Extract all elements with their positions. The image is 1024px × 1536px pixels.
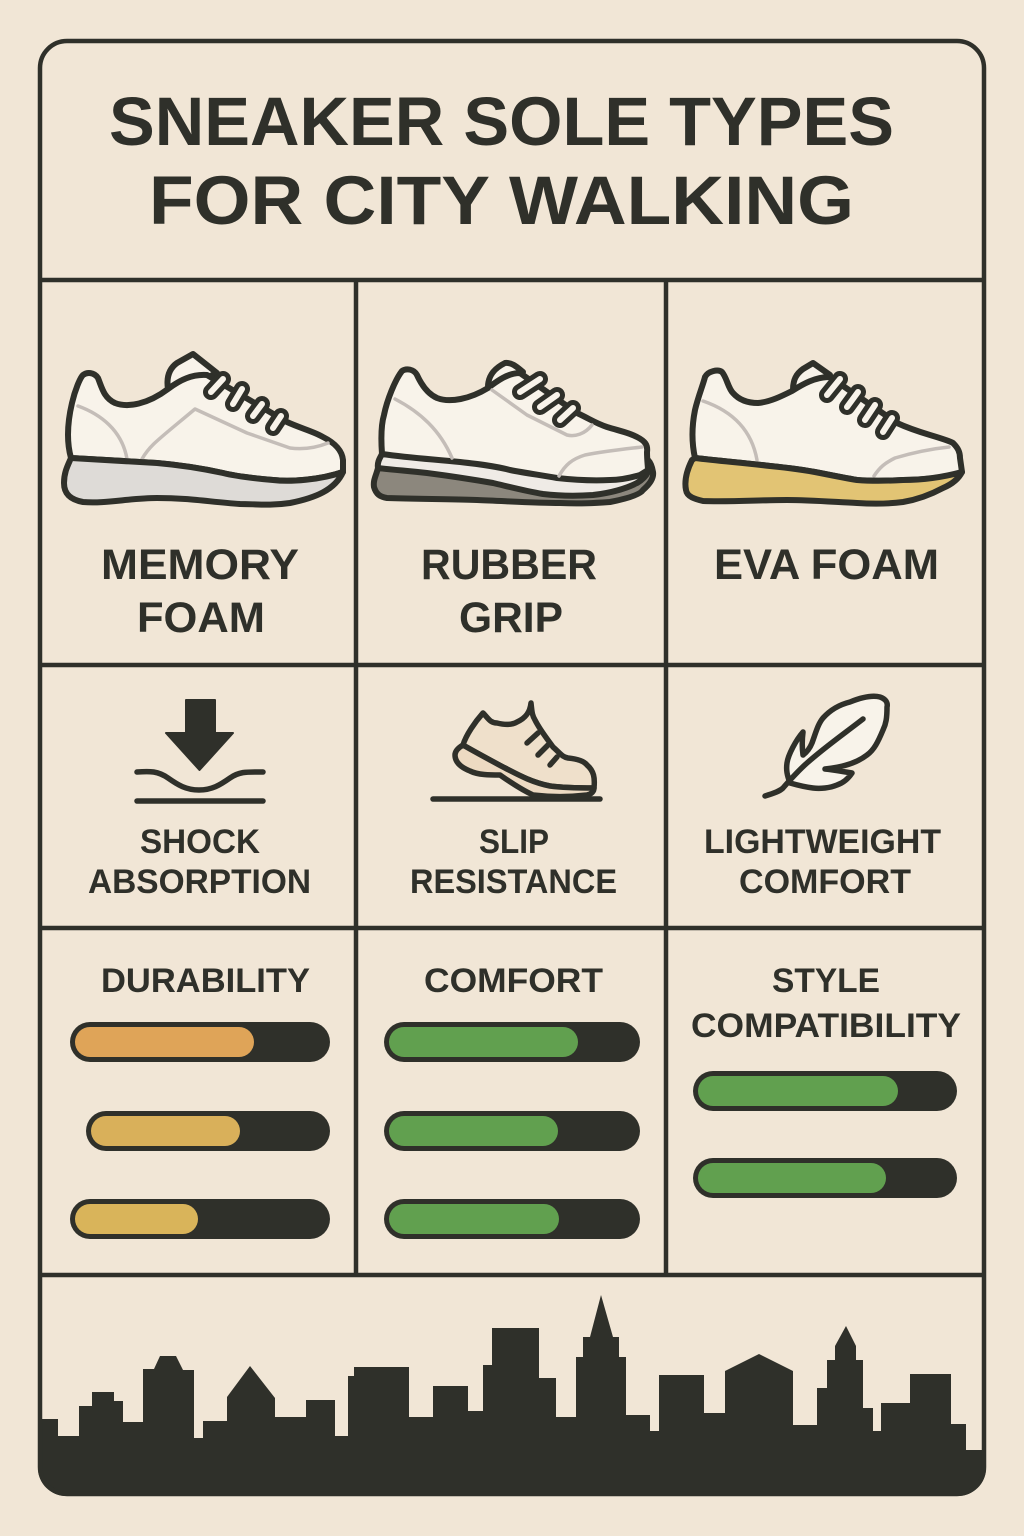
label: rubber grip [421,541,597,642]
icon: feather [765,696,887,796]
icon: slip resistance shoe [433,703,600,799]
chart: style compatibility: STYLE [772,962,880,1000]
panel: rubber grip sneaker [374,363,653,503]
icon: shock absorption arrow [137,700,263,801]
label: shock absorption: ABSORPTION [88,863,311,901]
label: memory foam [101,541,299,642]
title: SNEAKER SOLE TYPES [109,83,894,160]
label: memory foam: FOAM [137,594,265,642]
panel: city skyline [38,1295,986,1496]
chart: durability: DURABILITY [101,962,310,1000]
chart: comfort [384,962,640,1239]
label: rubber grip: RUBBER [421,541,597,589]
panel: EVA foam sneaker [685,363,962,504]
label: lightweight comfort [704,823,941,901]
label: rubber grip: GRIP [459,594,563,642]
panel: memory foam sneaker [64,354,343,505]
label: slip resistance: RESISTANCE [410,863,617,901]
label: slip resistance [410,823,617,901]
label: lightweight comfort: LIGHTWEIGHT [704,823,941,861]
label: slip resistance: SLIP [479,823,549,861]
chart: style compatibility: COMPATIBILITY [691,1007,961,1045]
label: EVA foam: EVA FOAM [714,541,939,589]
chart: style compatibility [691,962,961,1198]
label: lightweight comfort: COMFORT [739,863,911,901]
label: shock absorption: SHOCK [140,823,260,861]
label: shock absorption [88,823,311,901]
title: FOR CITY WALKING [149,162,854,239]
label: memory foam: MEMORY [101,541,299,589]
title [109,83,894,239]
chart: comfort: COMFORT [424,962,603,1000]
chart: durability [70,962,330,1239]
